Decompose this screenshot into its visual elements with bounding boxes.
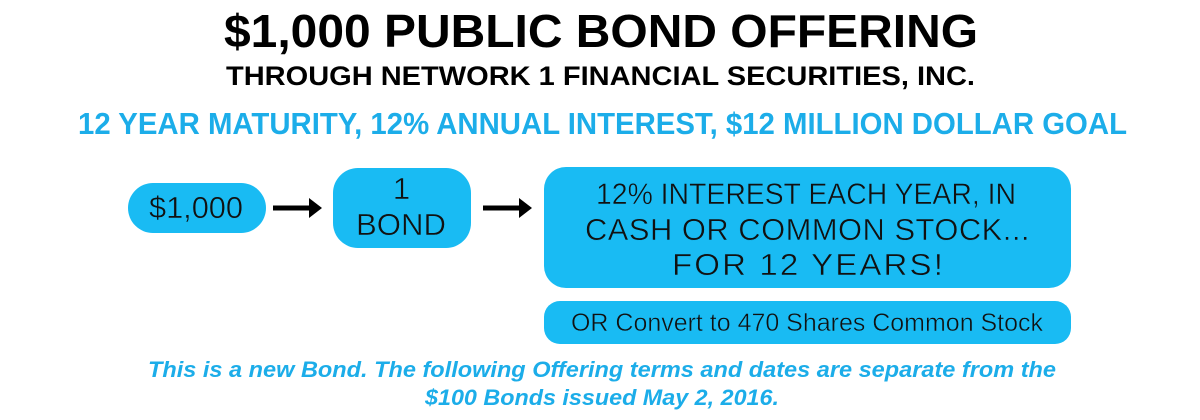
box: conversion option (544, 301, 1071, 344)
box: 1 bond: BOND (356, 207, 446, 242)
arrow: to interest (483, 198, 532, 218)
box: interest terms (544, 167, 1071, 288)
note: This is a new Bond. The following Offering terms and dates are separate from the (148, 357, 1056, 382)
box: $1,000: $1,000 (149, 190, 243, 225)
box: interest terms: CASH OR COMMON STOCK... (585, 212, 1030, 247)
title: $1,000 PUBLIC BOND OFFERING (224, 5, 978, 57)
note: $100 Bonds issued May 2, 2016. (424, 385, 779, 410)
arrow: to bond (273, 198, 322, 218)
box: conversion option: OR Convert to 470 Shares Common Stock (571, 309, 1043, 337)
box: 1 bond (333, 168, 471, 248)
box: $1,000 (128, 183, 266, 233)
note (148, 357, 1056, 410)
subtitle: THROUGH NETWORK 1 FINANCIAL SECURITIES, INC. (226, 61, 975, 91)
blue heading: offering terms: 12 YEAR MATURITY, 12% ANNUAL INTEREST, $12 MILLION DOLLAR GOAL (78, 106, 1127, 141)
box: interest terms: FOR 12 YEARS! (672, 247, 945, 282)
box: 1 bond: 1 (393, 171, 410, 206)
box: interest terms: 12% INTEREST EACH YEAR, IN (596, 178, 1016, 211)
